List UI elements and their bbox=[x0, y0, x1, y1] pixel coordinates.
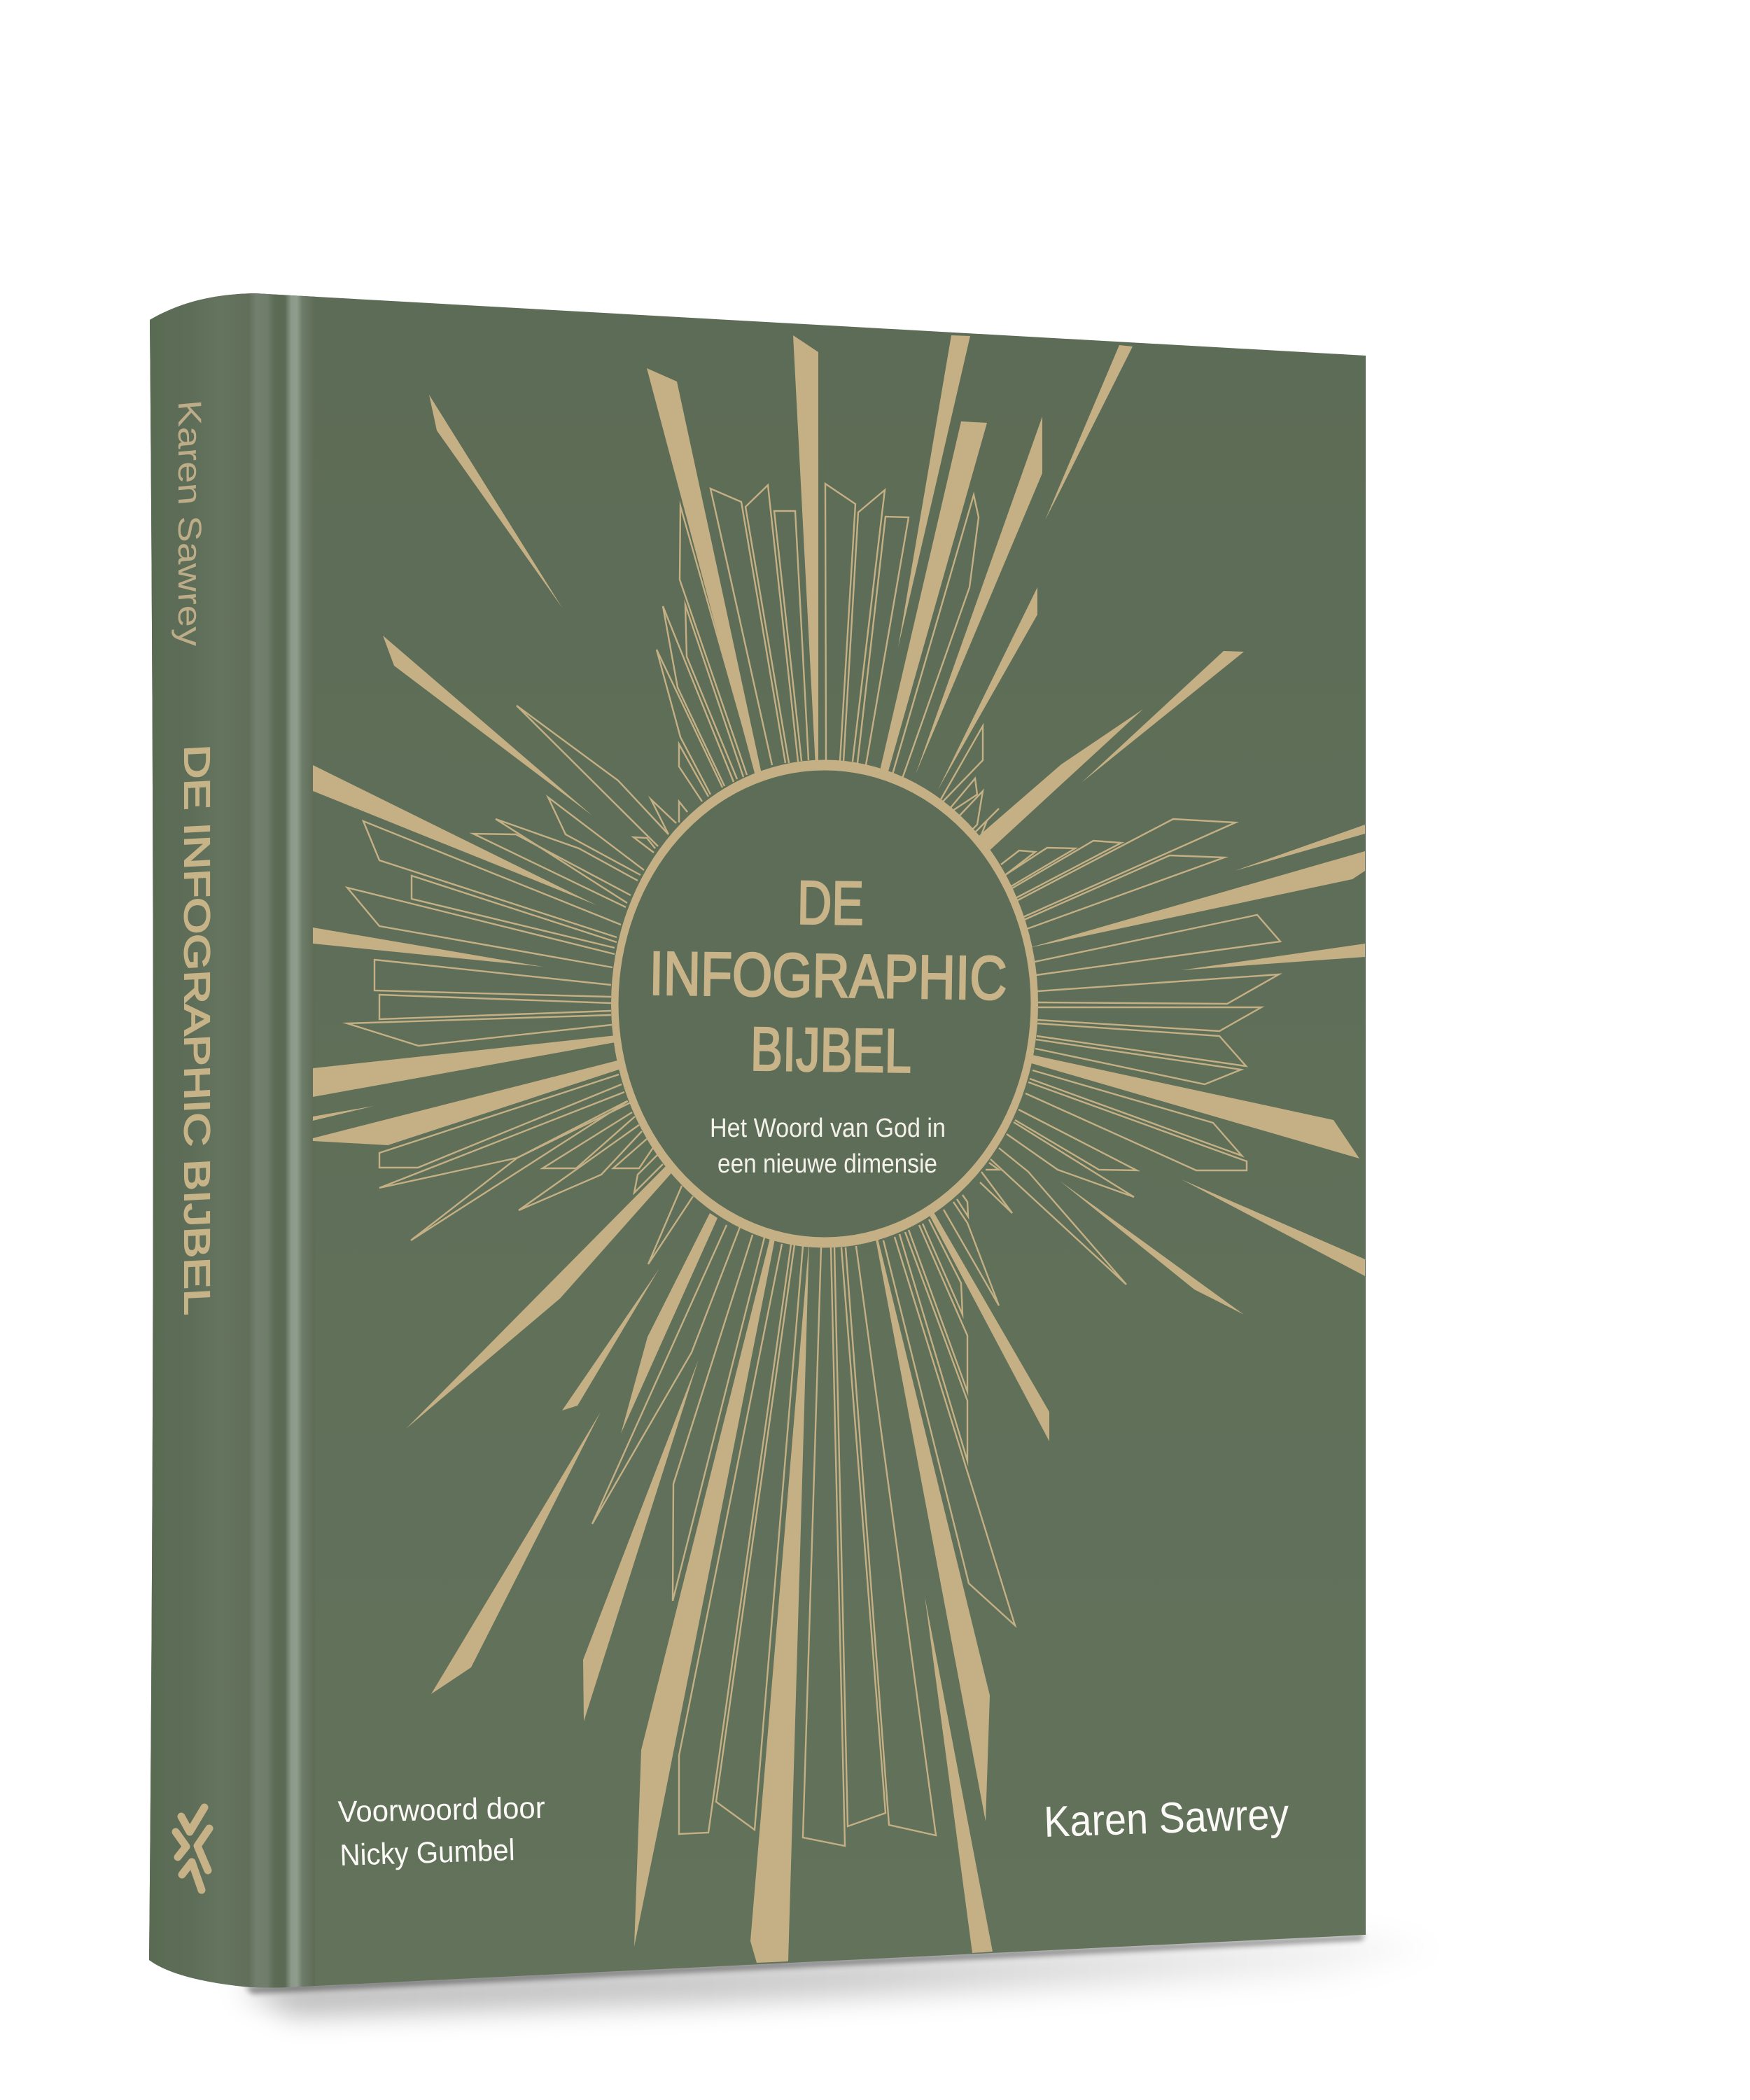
title: BIJBEL bbox=[750, 1014, 912, 1086]
book cover bbox=[149, 293, 1366, 1988]
foreword credit bbox=[337, 1791, 545, 1872]
spine title: DE INFOGRAPHIC BIJBEL bbox=[177, 744, 217, 1316]
subtitle bbox=[710, 1114, 946, 1179]
subtitle: Het Woord van God in bbox=[710, 1114, 946, 1143]
title bbox=[648, 865, 1009, 1087]
title: DE bbox=[797, 867, 864, 938]
foreword credit: Nicky Gumbel bbox=[340, 1833, 515, 1872]
filled gold rays bbox=[313, 335, 1365, 1963]
outlined rays bbox=[347, 484, 1280, 1846]
title: INFOGRAPHIC bbox=[649, 938, 1007, 1013]
book spine bbox=[147, 287, 315, 1995]
central medallion bbox=[611, 760, 1038, 1247]
subtitle: een nieuwe dimensie bbox=[718, 1149, 937, 1179]
book shadow bbox=[238, 1935, 1442, 2015]
icon: publisher logo bbox=[176, 1807, 209, 1890]
foreword credit: Voorwoord door bbox=[337, 1791, 545, 1829]
spine author: Karen Sawrey bbox=[172, 398, 209, 648]
author name: Karen Sawrey bbox=[1043, 1790, 1289, 1847]
